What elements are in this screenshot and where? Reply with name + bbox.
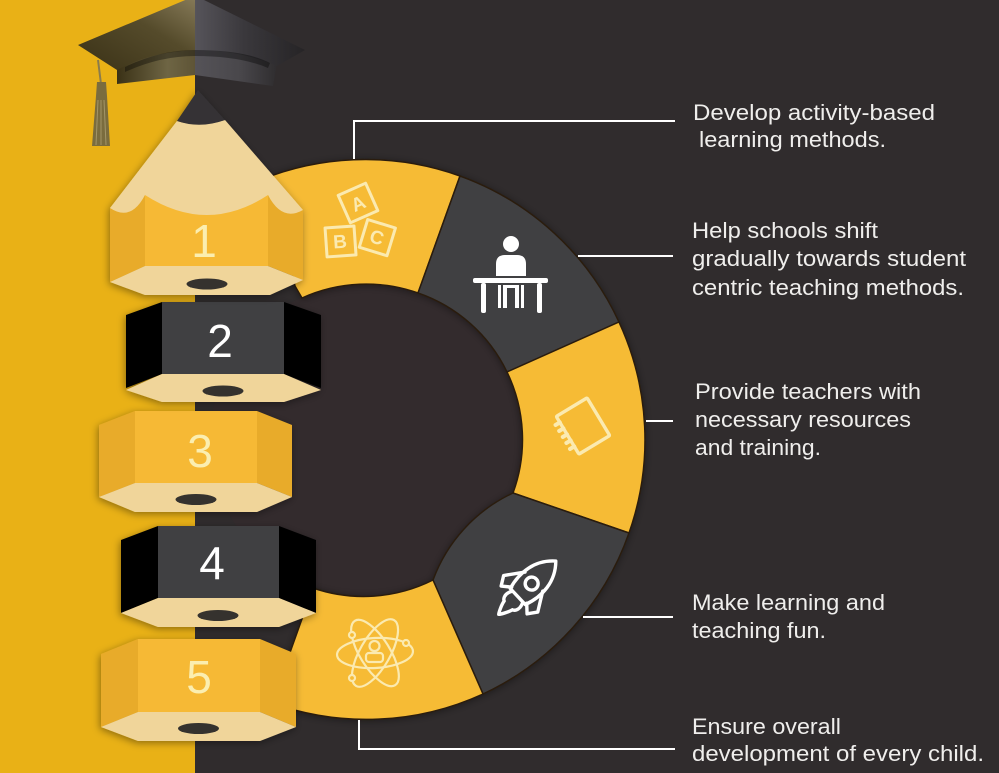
text: step 5: Ensure overall [692,714,841,739]
text: step 2: centric teaching methods. [692,275,964,300]
text: step 4 [692,590,885,643]
segment 2: dark [418,176,619,372]
pencil segment 4 [121,526,316,627]
text: step 4: Make learning and [692,590,885,615]
pencil segment 3: 3 [187,425,213,477]
pencil segment 1 with sharpened tip [110,90,303,295]
pencil segment 5 [101,639,296,741]
icon: rocket [482,543,573,633]
text: step 3: and training. [695,435,821,460]
pencil segment 4: 4 [199,537,225,589]
text: step 3 [695,379,921,460]
pencil segment 3 [99,411,292,512]
text: step 5: development of every child. [692,741,984,766]
icon: atom with person [336,613,414,693]
segment 3: yellow [507,322,645,533]
pencil segment 1 with sharpened tip: 1 [191,215,217,267]
segment 4: dark [433,493,629,694]
segment 5: yellow [272,580,483,719]
ring centre disc [210,284,522,596]
icon: alphabet blocks: A [348,192,369,217]
leader line 2 [578,255,673,257]
cap band [117,48,195,84]
text: step 1: learning methods. [699,127,886,152]
leader line 1 [354,121,675,159]
leader line 4 [583,616,673,618]
background: yellow left band [0,0,195,773]
text: step 3: necessary resources [695,407,911,432]
text: step 5 [692,714,984,766]
text: step 2: Help schools shift [692,218,878,243]
text: step 1: Develop activity-based [693,100,935,125]
icon: spiral notebook [552,398,610,457]
ring of five segments [272,159,645,719]
icon: alphabet blocks: B [333,232,348,253]
pencil segment 5: 5 [186,651,212,703]
segment 1: yellow [272,159,460,298]
pencil segment 2: 2 [207,315,233,367]
cap tassel [92,60,110,146]
icon: graduation cap [78,0,305,146]
pencil segment 2 [126,302,321,402]
text: step 4: teaching fun. [692,618,826,643]
icon: student at desk [473,236,548,313]
leader line 5 [359,720,675,749]
leader line 3 [646,420,673,422]
text: step 2 [692,218,966,300]
text: step 3: Provide teachers with [695,379,921,404]
cap board [78,0,195,70]
cap band shadow [125,50,270,72]
text: step 2: gradually towards student [692,246,966,271]
icon: alphabet blocks [325,183,395,257]
text: step 1 [693,100,935,152]
icon: alphabet blocks: C [367,226,386,251]
